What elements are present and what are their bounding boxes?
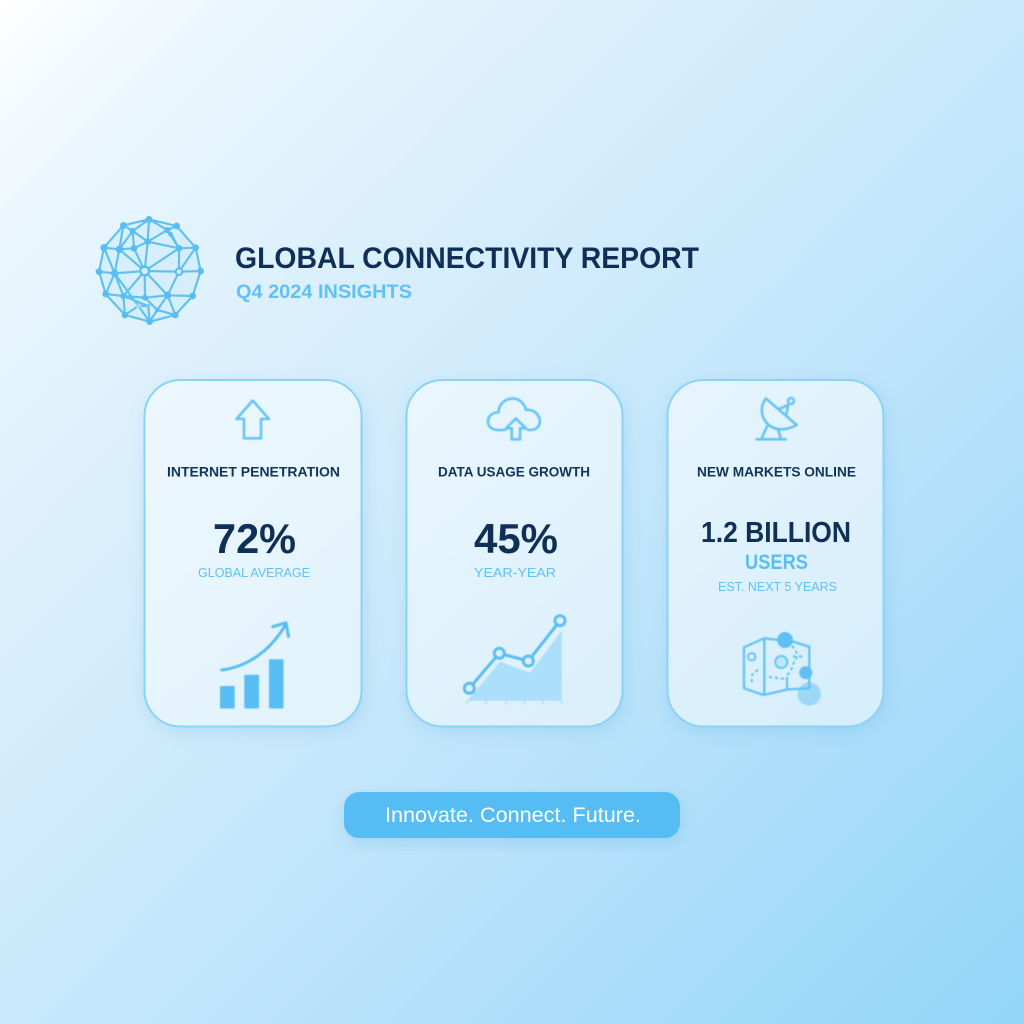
line chart [464,616,565,705]
label: data usage growth: DATA USAGE GROWTH [438,464,590,480]
caption: global average: GLOBAL AVERAGE [198,565,310,580]
value: 45%: 45% [474,515,558,562]
caption: year-year: YEAR-YEAR [474,565,556,580]
value: 1.2 billion: 1.2 BILLION [701,517,851,549]
icon: map with pins [744,632,821,706]
icon: network globe [96,216,204,325]
title: GLOBAL CONNECTIVITY REPORT [235,242,699,275]
tagline pill [344,792,680,842]
tagline text: Innovate. Connect. Future. [385,804,641,827]
label: internet penetration: INTERNET PENETRATION [167,464,340,480]
value: 72%: 72% [213,515,296,562]
icon: satellite dish [757,398,797,439]
value unit: users: USERS [745,551,808,574]
panel: internet penetration [144,380,364,731]
icon: cloud upload [488,399,540,439]
label: new markets online: NEW MARKETS ONLINE [697,464,856,480]
panel: data usage growth [406,380,625,731]
bar chart with growth arrow [220,623,288,708]
subtitle: Q4 2024 INSIGHTS [236,282,412,303]
panel: new markets online [668,380,886,731]
caption: next 5 years: EST. NEXT 5 YEARS [718,579,837,594]
icon: up arrow [236,400,269,438]
